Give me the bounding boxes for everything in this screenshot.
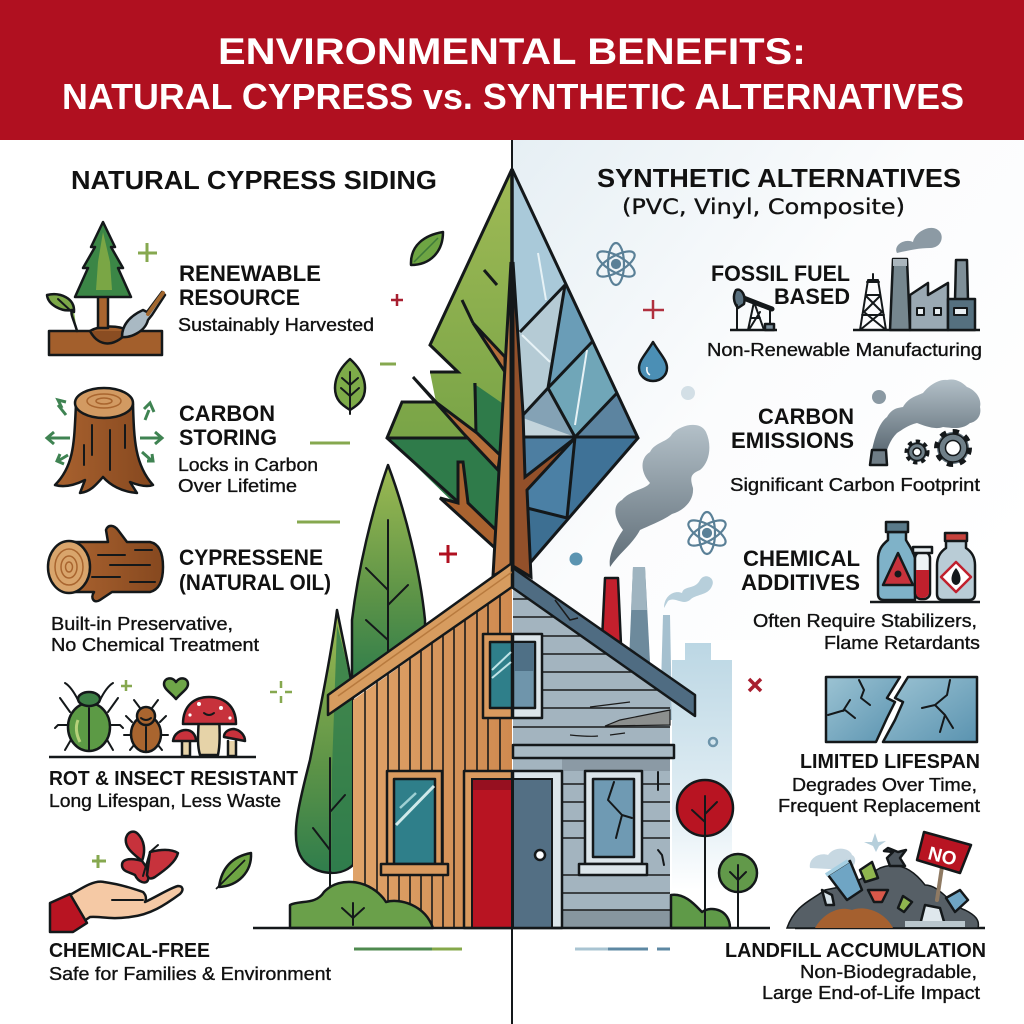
synthetic half [513,568,695,928]
item: chemical additives: ADDITIVES [741,570,860,595]
item: cypressene natural oil: CYPRESSENE [179,545,323,570]
small tree left of house [296,610,353,895]
decoration: red plus lower [439,545,457,563]
icon: tree stump with arrows [47,388,162,493]
red round tree [677,780,733,928]
item: carbon emissions: EMISSIONS [731,428,854,453]
icon: atom top [594,243,638,285]
decoration: floating leaf [216,853,251,889]
icon: beetle, bug and mushrooms [49,683,256,757]
item: carbon storing: CARBON [179,401,275,426]
decoration: sparkle [270,681,292,703]
title banner: ENVIRONMENTAL BENEFITS: [218,31,806,72]
bottom dashes [354,948,670,950]
item: limited lifespan [778,677,980,816]
item: fossil fuel based [707,228,982,360]
decoration: red cross [749,679,761,691]
item: renewable resource: RENEWABLE [179,261,321,286]
green round tree [719,854,757,928]
pale smoke plume [664,576,713,608]
decoration: green dashes [297,364,396,522]
item: cypressene natural oil [48,526,331,655]
icon: factory with smoke [853,228,980,330]
item: fossil fuel based: BASED [774,284,850,309]
item: fossil fuel based: FOSSIL FUEL [711,261,850,286]
icon: cracked panel [826,677,977,742]
item: chemical-free: CHEMICAL-FREE [49,940,210,962]
item: rot and insect resistant [49,678,298,811]
item: landfill accumulation [725,832,986,1003]
icon: landfill heap with NO sign [787,832,985,928]
main dark smoke plume [610,425,709,567]
item: landfill accumulation: Large End-of-Life Impact [762,983,980,1003]
item: chemical additives: CHEMICAL [743,546,860,571]
item: limited lifespan: LIMITED LIFESPAN [800,751,980,773]
item: chemical additives: Flame Retardants [824,633,980,653]
decoration: red plus upper left [391,294,403,306]
background city and smokestacks [602,567,732,890]
icon: hand holding butterfly [50,832,182,932]
item: chemical-free: Safe for Families & Environment [49,964,331,984]
heading: synthetic alternatives: SYNTHETIC ALTERNATIVES [597,163,961,193]
center divider line [511,140,513,1024]
item: carbon emissions: CARBON [758,404,854,429]
item: renewable resource: Sustainably Harvested [178,315,374,335]
ground line [253,927,770,929]
title banner: NATURAL CYPRESS vs. SYNTHETIC ALTERNATIVES [62,76,964,117]
item: carbon storing: Locks in Carbon [178,455,318,475]
item: landfill accumulation: Non-Biodegradable, [800,962,977,982]
decoration: round leaf [335,359,365,414]
item: chemical-free [49,832,331,984]
icon: landfill heap with NO sign: NO [926,843,959,871]
item: chemical additives: Often Require Stabilizers, [753,611,977,631]
central tree: half green, half crystalline [387,169,638,577]
decoration: red plus right [643,300,664,319]
title banner [0,0,1024,140]
item: fossil fuel based: Non-Renewable Manufacturing [707,340,982,360]
right shrub [671,895,730,928]
decoration: green plus [138,243,157,262]
item: cypressene natural oil: (NATURAL OIL) [179,570,331,595]
item: chemical additives [741,522,980,653]
heading: synthetic alternatives: (PVC, Vinyl, Composite) [622,195,905,219]
item: cypressene natural oil: Built-in Preservative, [51,614,233,634]
item: landfill accumulation: LANDFILL ACCUMULATION [725,940,986,962]
item: carbon emissions: Significant Carbon Footprint [730,475,980,495]
item: carbon storing [47,388,318,496]
heading: synthetic alternatives [597,163,961,219]
icon: wooden log [48,526,163,601]
house: half cypress wood, half synthetic siding [328,563,695,928]
decoration: green plus [121,680,132,691]
item: cypressene natural oil: No Chemical Treatment [51,635,259,655]
icon: smoke cloud with gears [870,379,980,465]
decoration: floating leaf top [411,232,443,265]
icon: chemical bottles [870,522,980,602]
item: carbon emissions [730,379,980,495]
tree center line [510,169,514,565]
tall cypress tree behind house [352,465,425,685]
icon: heart [164,678,188,699]
item: rot and insect resistant: Long Lifespan, Less Waste [49,791,281,811]
item: rot and insect resistant: ROT & INSECT RESISTANT [49,768,298,790]
background: synthetic side tint [513,140,1024,640]
item: carbon storing: Over Lifetime [178,476,297,496]
item: renewable resource [47,222,374,355]
icon: sapling, shovel and soil [47,222,165,355]
wood half [328,563,512,928]
item: carbon storing: STORING [179,425,277,450]
item: limited lifespan: Frequent Replacement [778,796,980,816]
decoration: pale and blue dots [570,386,717,746]
tree trunk and branches [413,262,575,577]
item: limited lifespan: Degrades Over Time, [792,775,977,795]
icon: atom lower [685,512,729,554]
icon: water drop [639,342,667,381]
item: renewable resource: RESOURCE [179,285,300,310]
icon: pumpjack [730,290,777,330]
heading: natural cypress siding: NATURAL CYPRESS SIDING [71,165,437,195]
left shrub [290,882,433,928]
